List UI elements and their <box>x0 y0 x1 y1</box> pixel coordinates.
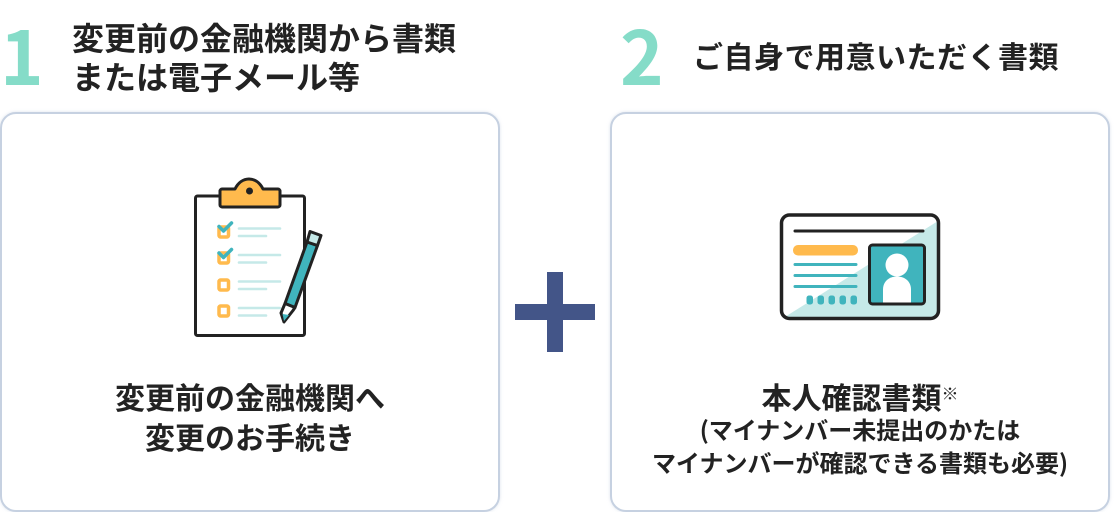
heading: documents from previous financial institution: または電子メール等 <box>72 53 360 99</box>
panel note: My Number: (マイナンバー未提出のかたは <box>700 411 1020 446</box>
panel text: change procedure: 変更のお手続き <box>145 414 355 458</box>
heading: documents you prepare: ご自身で用意いただく書類 <box>693 33 1059 77</box>
panel text: identity documents: 本人確認書類※ <box>762 374 958 418</box>
heading: documents from previous financial institution <box>72 14 456 99</box>
panel: left documents <box>0 112 500 512</box>
panel: right documents <box>610 112 1110 512</box>
panel text: change procedure: 変更前の金融機関へ <box>115 374 385 418</box>
step number 1: 1 <box>0 0 44 107</box>
step number 2: 2 <box>620 0 664 107</box>
panel note: My Number: マイナンバーが確認できる書類も必要) <box>652 444 1068 478</box>
panel text: change procedure <box>115 374 385 458</box>
heading: documents from previous financial institution: 変更前の金融機関から書類 <box>72 14 456 60</box>
panel note: My Number <box>652 411 1068 478</box>
plus sign <box>515 272 595 352</box>
